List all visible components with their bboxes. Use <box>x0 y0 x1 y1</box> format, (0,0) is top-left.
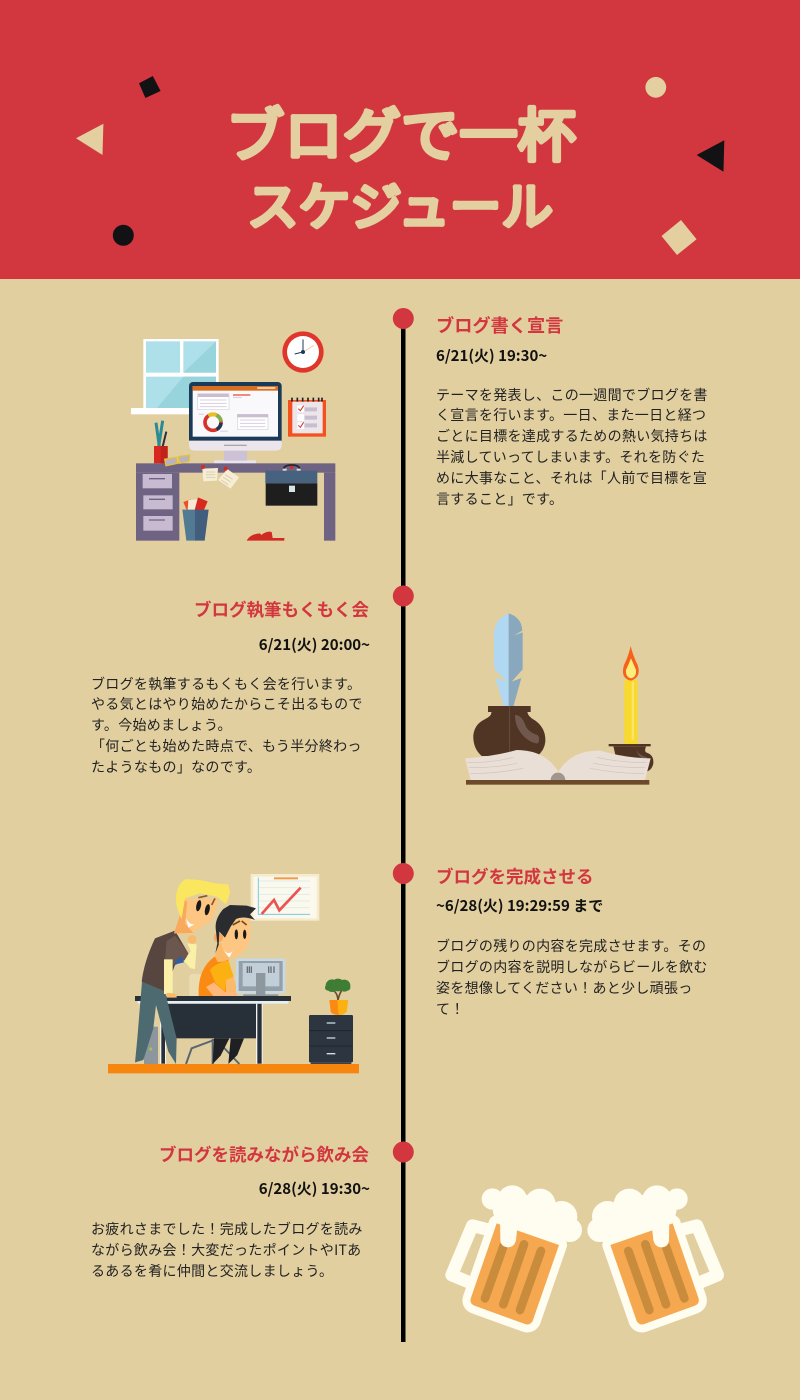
event 2 description: やる気とはやり始めたからこそ出るもので <box>91 694 363 714</box>
event 2 date: 6/21(火) 20:00~ <box>259 634 370 654</box>
illustration: office desk <box>131 331 336 541</box>
event 1 description <box>436 385 708 509</box>
event 3 description: 姿を想像してください！あと少し頑張っ <box>436 978 693 998</box>
event 1 description: く宣言を行います。一日、また一日と経つ <box>436 405 706 425</box>
event 4 date: 6/28(火) 19:30~ <box>259 1178 370 1198</box>
event 1 text <box>436 312 708 509</box>
desk <box>136 463 335 541</box>
event 3 description: ブログの内容を説明しながらビールを飲む <box>436 957 708 977</box>
beer mug right <box>587 1185 718 1324</box>
event 1 date: 6/21(火) 19:30~ <box>436 344 547 366</box>
event 2 description: ブログを執筆するもくもく会を行います。 <box>91 674 361 694</box>
header banner <box>0 0 800 279</box>
event 1 description: 言すること」です。 <box>436 489 563 509</box>
event 3 description: て！ <box>436 999 465 1019</box>
slippers <box>247 532 284 541</box>
event 2 text <box>91 597 370 777</box>
event 2 description <box>91 674 363 777</box>
event 4 description: ながら飲み会！大変だったポイントやITあ <box>91 1240 362 1260</box>
seated boy <box>199 905 256 1064</box>
event 2 heading: ブログ執筆もくもく会 <box>194 597 369 622</box>
event 4 text <box>91 1142 370 1281</box>
candle holder <box>609 744 653 772</box>
waste bin <box>182 497 209 541</box>
event 1 description: めに大事なこと、それは「人前で目標を宣 <box>436 468 707 488</box>
event 1 description: ごとに目標を達成するための熱い気持ちは <box>436 426 708 446</box>
standing man <box>135 879 230 1064</box>
illustration: clinking beer mugs <box>445 1185 724 1332</box>
event 3 date: ~6/28(火) 19:29:59 まで <box>436 894 603 916</box>
illustration: quill, book and candle <box>465 613 654 785</box>
chair <box>186 974 239 1064</box>
desk top <box>135 996 291 1001</box>
floor <box>108 1064 359 1073</box>
potted plant <box>325 979 350 1015</box>
computer monitor back <box>236 958 285 996</box>
title and decorative shapes <box>76 76 724 255</box>
glasses <box>165 455 190 466</box>
briefcase <box>265 465 317 506</box>
event 2 description: たようなもの」なのです。 <box>91 757 261 777</box>
title: スケジュール <box>247 166 553 240</box>
event 3 description: ブログの残りの内容を完成させます。その <box>436 936 706 956</box>
window <box>131 339 219 414</box>
computer monitor <box>189 382 282 464</box>
illustration: two people at a computer <box>108 874 359 1074</box>
title: ブログで一杯 <box>226 89 576 173</box>
event 4 description: るあるを肴に仲間と交流しましょう。 <box>91 1261 333 1281</box>
decorative shapes <box>76 76 724 255</box>
event 3 heading: ブログを完成させる <box>436 864 594 889</box>
beer mug left <box>452 1185 582 1324</box>
sticky notes <box>201 465 239 489</box>
event 4 description <box>91 1219 363 1281</box>
computer tower <box>144 1027 158 1064</box>
quill feather <box>494 613 523 707</box>
event 1 description: 半減していってしまいます。それを防ぐた <box>436 447 705 467</box>
event 2 description: 「何ごとも始めた時点で、もう半分終わっ <box>91 736 362 756</box>
filing cabinet <box>309 1015 353 1064</box>
ink bottle <box>473 706 545 756</box>
wall clock <box>282 331 324 373</box>
calendar checklist <box>288 398 326 437</box>
open book <box>465 750 651 785</box>
title <box>226 89 576 240</box>
event 4 description: お疲れさまでした！完成したブログを読み <box>91 1219 363 1239</box>
event 2 description: す。今始めましょう。 <box>91 715 232 735</box>
event 1 heading: ブログ書く宣言 <box>436 312 563 338</box>
wall chart poster <box>251 874 319 921</box>
candle <box>623 646 639 744</box>
event 3 description <box>436 936 708 1019</box>
event 3 text <box>436 864 708 1019</box>
event 1 description: テーマを発表し、この一週間でブログを書 <box>436 385 708 405</box>
desk <box>138 1001 288 1064</box>
event 4 heading: ブログを読みながら飲み会 <box>159 1142 369 1167</box>
pencil cup <box>154 421 168 463</box>
